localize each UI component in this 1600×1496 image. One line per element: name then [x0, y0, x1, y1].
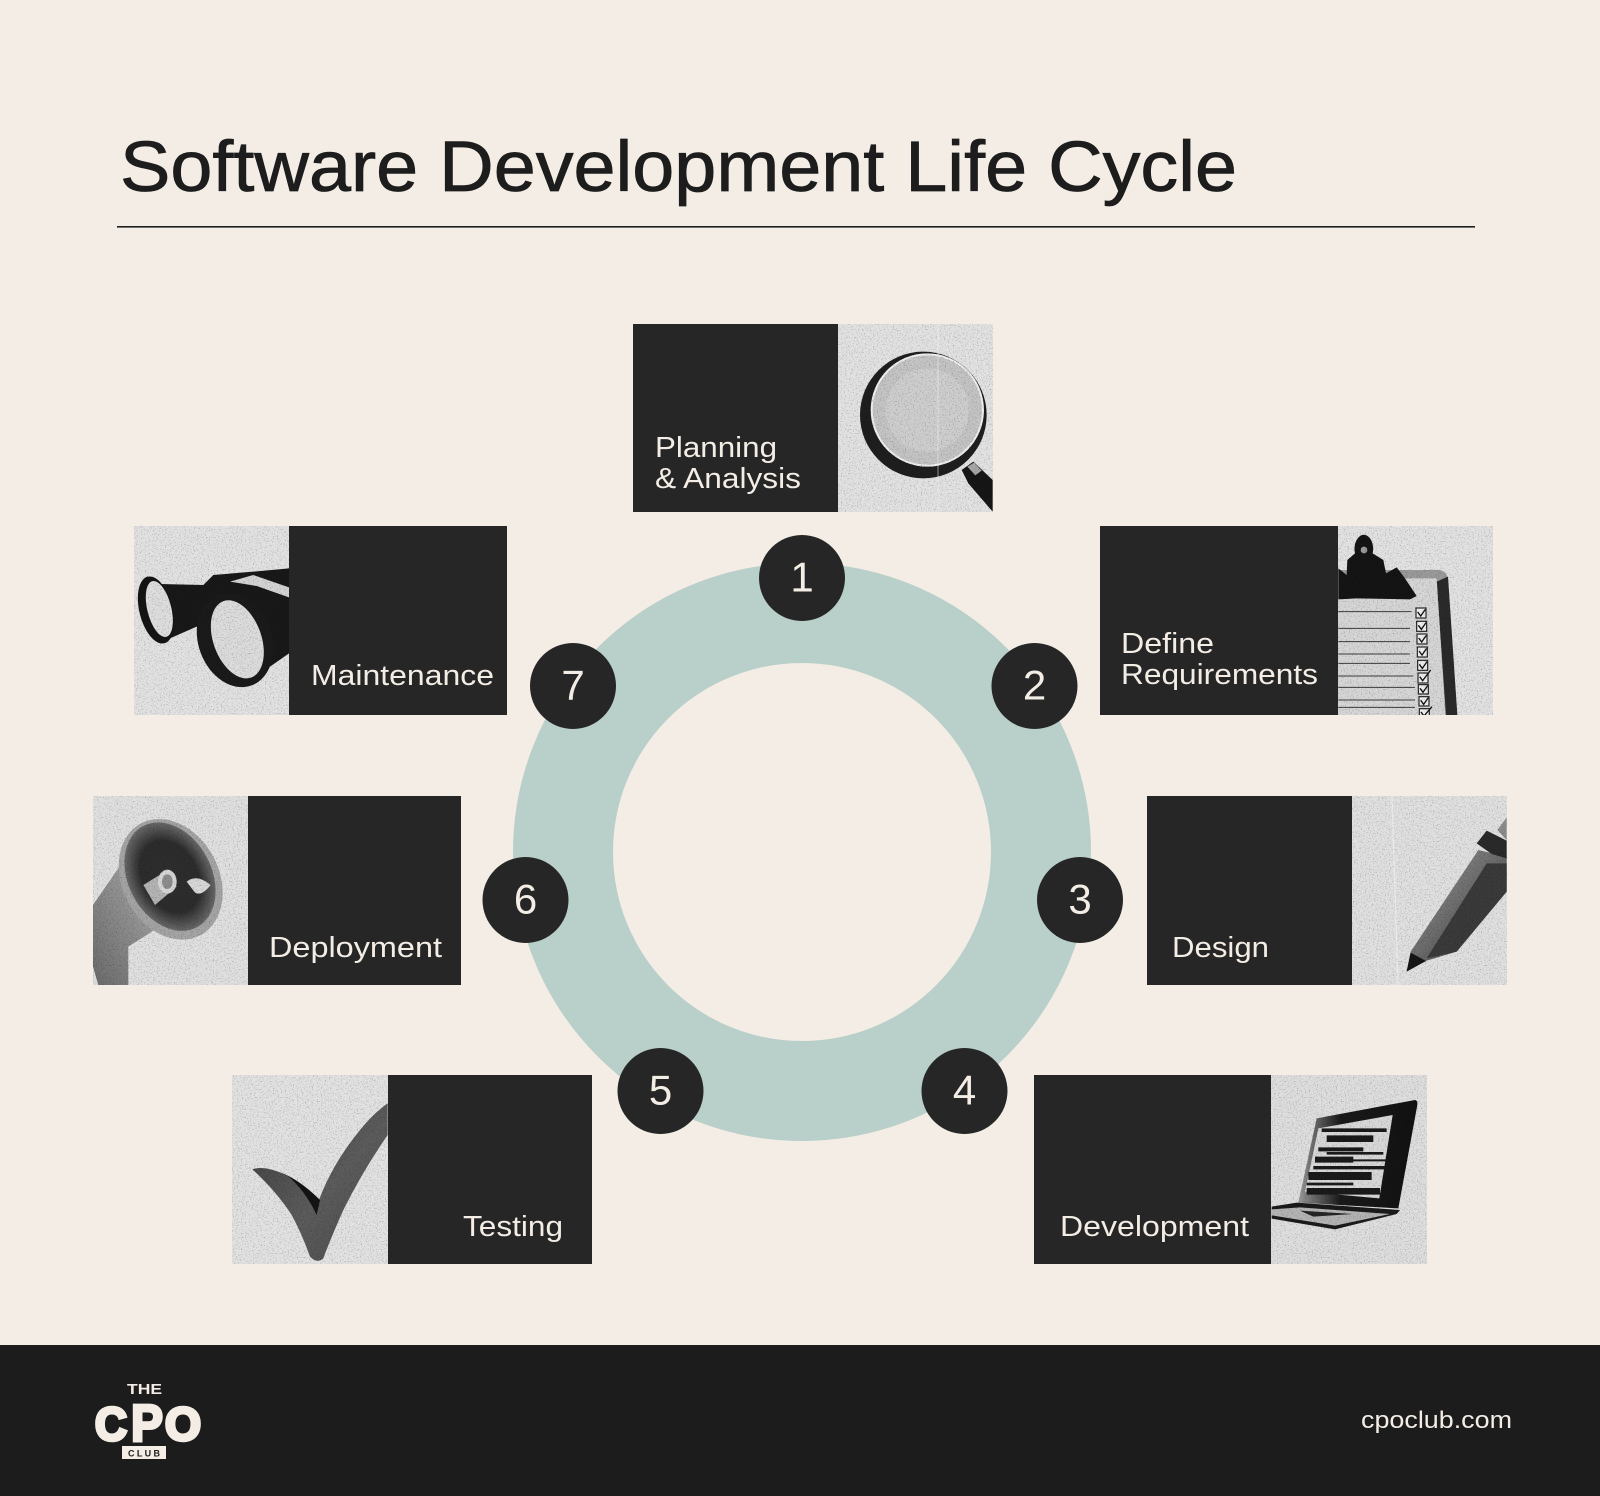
cycle ring	[563, 613, 1041, 1091]
label panel: Deployment	[248, 796, 461, 985]
number badge 4: 4	[953, 1066, 976, 1114]
number badge 6	[482, 857, 568, 943]
label panel: Planning & Analysis	[633, 324, 838, 512]
label panel: Planning & Analysis: Planning	[655, 432, 777, 464]
step 6: Deployment card	[93, 796, 461, 985]
logo: The CPO Club: C	[95, 1398, 127, 1450]
number badge 7	[530, 643, 616, 729]
label panel: Define Requirements	[1100, 526, 1338, 715]
number badge 1	[759, 535, 845, 621]
icon: clipboard checklist	[1338, 526, 1493, 718]
logo: The CPO Club: O	[165, 1398, 201, 1450]
number badge 2	[992, 643, 1078, 729]
website url: cpoclub.com	[1361, 1407, 1512, 1434]
footer bar	[0, 1345, 1600, 1496]
icon: megaphone	[93, 796, 248, 985]
step 4: Development card	[1034, 1075, 1427, 1264]
step 2: Define Requirements card	[1100, 526, 1493, 718]
label panel: Design	[1147, 796, 1352, 985]
icon: binoculars	[132, 526, 289, 715]
step 3: Design card	[1147, 796, 1507, 985]
number badge 7: 7	[561, 662, 585, 708]
number badge 4	[922, 1048, 1008, 1134]
label panel: Maintenance	[289, 526, 507, 715]
label panel: Deployment: Deployment	[269, 932, 442, 964]
icon: laptop with code	[1271, 1075, 1427, 1264]
number badge 1: 1	[790, 554, 814, 600]
logo: The CPO Club	[95, 1382, 201, 1459]
step 7: Maintenance card	[132, 526, 507, 715]
number badge 6: 6	[514, 876, 537, 922]
number badge 5	[618, 1048, 704, 1134]
label panel: Testing	[388, 1075, 592, 1264]
icon: pencil	[1352, 796, 1507, 985]
label panel: Planning & Analysis: & Analysis	[655, 463, 801, 495]
label panel: Define Requirements: Define	[1121, 628, 1214, 660]
label panel: Development	[1034, 1075, 1271, 1264]
logo: The CPO Club: THE	[127, 1382, 162, 1398]
title: Software Development Life Cycle	[120, 128, 1237, 207]
icon: check mark	[232, 1075, 388, 1264]
icon: magnifying glass	[838, 324, 993, 512]
step 5: Testing card	[232, 1075, 592, 1264]
number badge 2: 2	[1023, 662, 1046, 708]
label panel: Maintenance: Maintenance	[311, 660, 494, 692]
step 1: Planning & Analysis card	[633, 324, 993, 512]
label panel: Development: Development	[1060, 1211, 1249, 1243]
number badge 3	[1037, 857, 1123, 943]
label panel: Testing: Testing	[463, 1211, 563, 1243]
logo: The CPO Club: P	[131, 1395, 163, 1453]
label panel: Design: Design	[1172, 932, 1269, 964]
logo: The CPO Club: CLUB	[128, 1448, 160, 1458]
label panel: Define Requirements: Requirements	[1121, 659, 1318, 691]
number badge 3: 3	[1068, 876, 1092, 922]
number badge 5: 5	[649, 1066, 672, 1114]
